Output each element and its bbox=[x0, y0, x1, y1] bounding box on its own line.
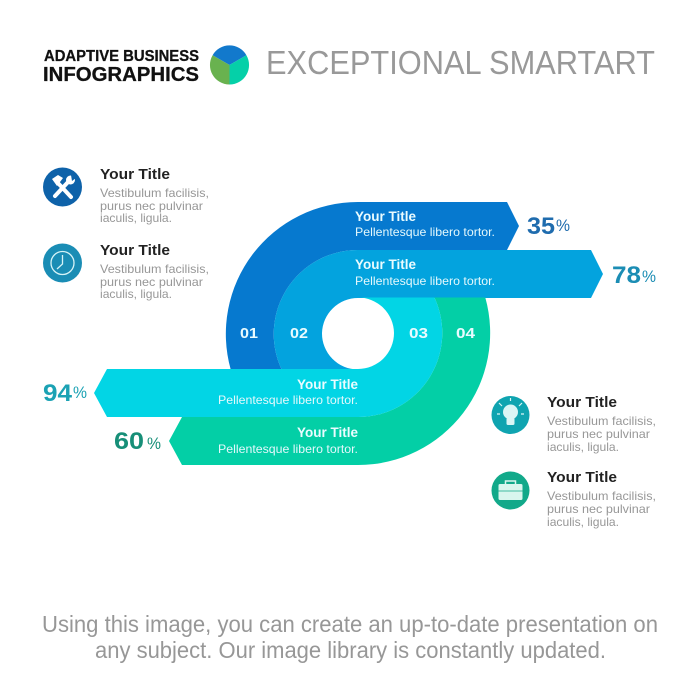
icon: clock bbox=[43, 244, 82, 282]
segment 01 arrow bbox=[226, 202, 519, 370]
text block: bottom right 2 bbox=[547, 470, 656, 529]
text block: bottom right 2: iaculis, ligula. bbox=[547, 515, 619, 529]
segment 03 arrow bbox=[94, 298, 442, 417]
percentage 35: 35 bbox=[527, 213, 555, 240]
segment 02 arrow bbox=[274, 250, 603, 370]
segment 02 label: Pellentesque libero tortor. bbox=[355, 274, 495, 288]
segment 04 label bbox=[218, 424, 358, 456]
percentage 60: % bbox=[147, 434, 161, 453]
text block: top left 1: Vestibulum facilisis, bbox=[100, 186, 209, 200]
title: EXCEPTIONAL SMARTART bbox=[266, 44, 655, 81]
brand name bbox=[43, 48, 199, 86]
text block: bottom right 1: Your Title bbox=[547, 395, 617, 411]
segment 01 label: Your Title bbox=[355, 208, 416, 224]
percentage 94: 94 bbox=[43, 380, 73, 407]
text block: top left 2: purus nec pulvinar bbox=[100, 275, 203, 289]
text block: bottom right 1: purus nec pulvinar bbox=[547, 427, 650, 441]
ring numbers: 01 bbox=[240, 325, 258, 342]
segment 04 arrow bbox=[169, 298, 490, 465]
percentage 94: % bbox=[73, 383, 87, 402]
segment 03 label: Your Title bbox=[297, 376, 358, 392]
brand name: INFOGRAPHICS bbox=[43, 63, 199, 86]
percentage 94 bbox=[43, 380, 87, 407]
text block: top left 1: iaculis, ligula. bbox=[100, 211, 172, 225]
percentage 78 bbox=[612, 262, 656, 289]
icon: brand logo bbox=[210, 45, 249, 85]
chart: interlocking ring arrows bbox=[94, 202, 603, 465]
ring numbers bbox=[240, 325, 476, 342]
footer text: any subject. Our image library is constantly updated. bbox=[95, 637, 606, 663]
icon: briefcase bbox=[492, 472, 530, 510]
footer text bbox=[42, 611, 658, 663]
text block: top left 2 bbox=[100, 243, 209, 301]
percentage 35: % bbox=[556, 216, 570, 235]
footer text: Using this image, you can create an up-to-date presentation on bbox=[42, 611, 658, 637]
text block: bottom right 2: purus nec pulvinar bbox=[547, 502, 650, 516]
text block: bottom right 1 bbox=[547, 395, 656, 454]
ring numbers: 04 bbox=[456, 325, 476, 342]
segment 02 label: Your Title bbox=[355, 256, 416, 272]
text block: top left 2: Vestibulum facilisis, bbox=[100, 262, 209, 276]
percentage 78: 78 bbox=[612, 262, 641, 289]
percentage 60: 60 bbox=[114, 428, 144, 455]
brand name: ADAPTIVE BUSINESS bbox=[44, 48, 199, 65]
segment 03 label: Pellentesque libero tortor. bbox=[218, 393, 358, 407]
segment 04 label: Your Title bbox=[297, 424, 358, 440]
icon: tools bbox=[43, 168, 82, 206]
icon: light bulb bbox=[492, 396, 530, 434]
percentage 35 bbox=[527, 213, 570, 240]
text block: top left 2: iaculis, ligula. bbox=[100, 287, 172, 301]
text block: bottom right 1: Vestibulum facilisis, bbox=[547, 414, 656, 428]
text block: bottom right 1: iaculis, ligula. bbox=[547, 440, 619, 454]
text block: bottom right 2: Your Title bbox=[547, 470, 617, 486]
text block: top left 1 bbox=[100, 167, 209, 225]
segment 02 label bbox=[355, 256, 495, 288]
segment 04 label: Pellentesque libero tortor. bbox=[218, 442, 358, 456]
text block: top left 1: Your Title bbox=[100, 167, 170, 183]
percentage 60 bbox=[114, 428, 161, 455]
text block: top left 1: purus nec pulvinar bbox=[100, 199, 203, 213]
percentage 78: % bbox=[642, 267, 656, 286]
segment 03 label bbox=[218, 376, 358, 407]
text block: bottom right 2: Vestibulum facilisis, bbox=[547, 489, 656, 503]
segment 01 label bbox=[355, 208, 495, 239]
segment 01 label: Pellentesque libero tortor. bbox=[355, 225, 495, 239]
text block: top left 2: Your Title bbox=[100, 243, 170, 259]
ring numbers: 03 bbox=[409, 325, 428, 342]
ring numbers: 02 bbox=[290, 325, 308, 342]
header bbox=[43, 44, 655, 86]
